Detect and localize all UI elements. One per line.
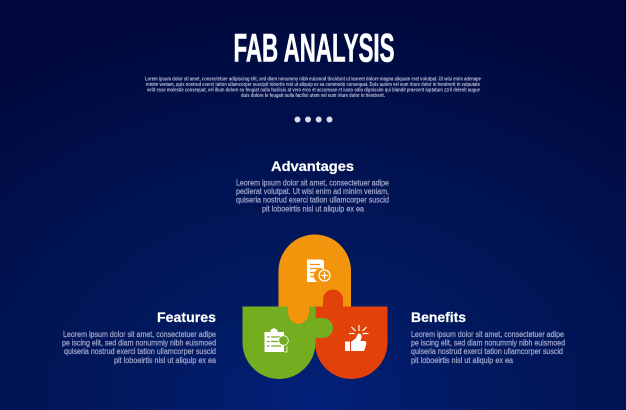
body: advantages: Leorem ipsum dolor sit amet, consectetuer adipe — [236, 178, 389, 188]
body: benefits: quiseria nostrud exerci tation ullamcorper suscid — [411, 347, 563, 356]
body: features: Leorem ipsum dolor sit amet, consectetuer adipe — [63, 330, 216, 339]
puzzle piece: red benefits — [315, 290, 388, 379]
body: features: pit loboeirtis nisl ut aliquip ex ea — [114, 356, 216, 365]
puzzle piece: orange advantages — [278, 235, 351, 324]
icon: thumbs up with sparks — [345, 325, 368, 351]
icon: clipboard with checklist — [264, 328, 288, 352]
intro text block: Lorem ipsum dolor sit amet, consectetuer adipiscing elit, sed diam nonummy nibh euismod tincidunt ut laoreet dolore magna aliquam erat volutpat. Ut wisi enim adenape — [145, 76, 481, 82]
panel: features text — [62, 309, 216, 365]
body: benefits: pe iscing elit, sed diam nonummiy nibh euismoed — [411, 339, 565, 348]
intro text block: duis dolore te feugait nulla facilisi utem vel eum iriure dolor in hendrerit. — [241, 93, 386, 99]
intro text block: velit esse molestie consequat, vel illum dolore eu feugiat nulla facilisis at vero eros et accumsan et iusto odio dignissim qui blandit praesent luptatum zzril delenit augue — [147, 88, 480, 94]
puzzle piece: green features — [242, 306, 333, 379]
body: advantages: pedierat volutpat. Ut wisi enim ad minim veniam, — [236, 187, 389, 196]
body: features: pe iscing elit, sed diam nonummiy nibh euismoed — [62, 339, 216, 348]
puzzle diagram — [242, 235, 388, 379]
body: advantages: quiseria nostrud exerci tation ullamcorper suscid — [236, 196, 389, 205]
body: advantages: pit loboeirtis nisl ut aliquip ex ea — [262, 204, 364, 213]
body: benefits: Leorem ipsum dolor sit amet, consectetuer adipe — [411, 330, 564, 339]
intro text block: minim veniam, quis nostrud exerci tation ullamcorper suscipit lobortis nisl ut aliquip ex ea commodo consequat. Duis autem vel eum iriure dolor in hendrerit in vulputate — [146, 82, 480, 88]
body: advantages — [236, 178, 389, 213]
body: benefits: pit loboeirtis nisl ut aliquip ex ea — [411, 356, 513, 365]
body: features: quiseria nostrud exerci tation ullamcorper suscid — [64, 347, 216, 356]
body: benefits — [411, 330, 565, 365]
heading: advantages: Advantages — [271, 158, 354, 174]
panel: benefits text — [411, 309, 565, 365]
body: features — [62, 330, 216, 365]
title: FAB ANALYSIS — [234, 26, 394, 70]
icon: document with plus — [307, 260, 330, 282]
heading: features: Features — [157, 309, 216, 325]
intro text block — [145, 76, 481, 99]
heading: benefits: Benefits — [411, 309, 466, 325]
pagination dots — [294, 116, 332, 122]
panel: advantages text — [236, 158, 389, 213]
